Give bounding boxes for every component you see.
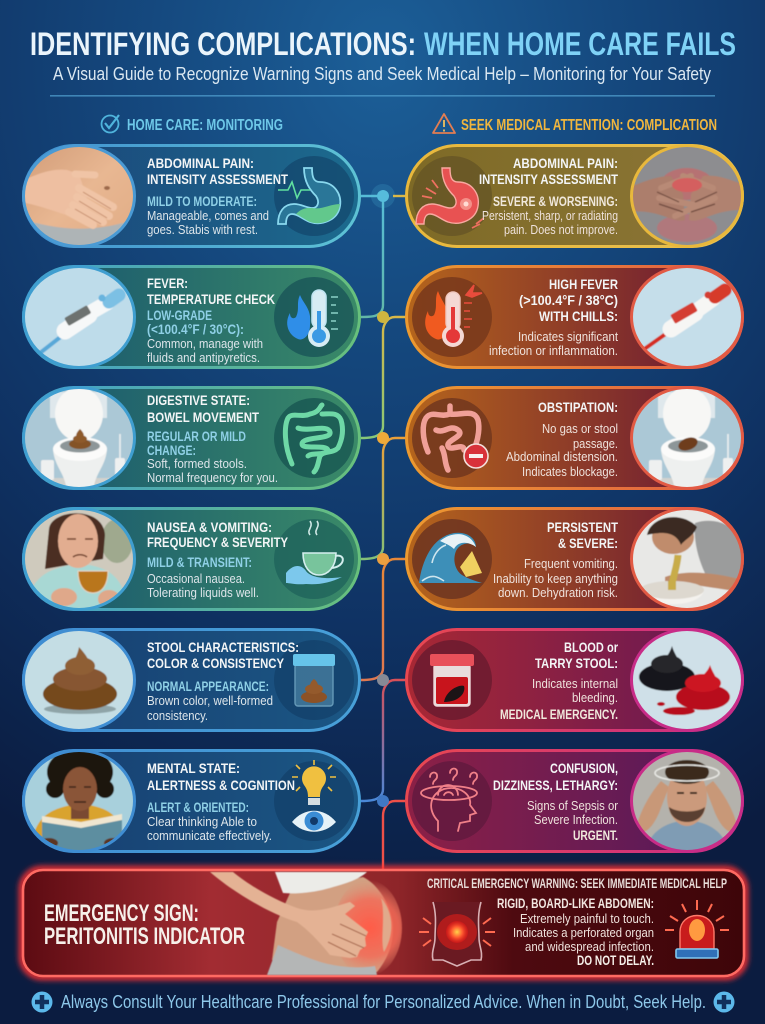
text block — [500, 639, 618, 722]
icon: confused head — [412, 761, 492, 841]
text block: Signs of Sepsis or — [527, 798, 619, 813]
text block: fluids and antipyretics. — [147, 350, 260, 365]
photo: dizzy man holding head — [630, 749, 744, 853]
icon: warning triangle — [433, 114, 455, 133]
panel: digestive state, home care — [19, 383, 360, 498]
photo: toilet with hard stool — [630, 386, 744, 490]
text block: infection or inflammation. — [489, 343, 618, 358]
text block: INTENSITY ASSESSMENT — [479, 171, 618, 187]
photo: digital thermometer — [22, 265, 136, 369]
photo: man vomiting into bowl — [630, 507, 744, 611]
heading: emergency sign: EMERGENCY SIGN: — [44, 900, 199, 927]
column heading: home care — [102, 115, 283, 134]
icon: light bulb and eye — [274, 760, 354, 841]
panel: obstipation, complication — [406, 383, 747, 498]
text block: STOOL CHARACTERISTICS: — [147, 639, 299, 655]
text block: Soft, formed stools. — [147, 456, 247, 471]
icon: blocked intestines — [412, 398, 492, 478]
text block: passage. — [573, 436, 618, 451]
photo: black and red stool — [630, 628, 744, 732]
warning text: Indicates a perforated organ — [513, 925, 654, 940]
text block: down. Dehydration risk. — [498, 585, 618, 600]
heading: emergency sign — [44, 900, 245, 950]
text block: INTENSITY ASSESSMENT — [147, 171, 288, 187]
text block — [479, 155, 618, 237]
node 5 — [377, 674, 389, 686]
icon: specimen jar — [274, 640, 354, 720]
text block: & SEVERE: — [558, 535, 618, 551]
text block: No gas or stool — [542, 421, 618, 436]
panel: stool characteristics, home care — [19, 625, 360, 735]
text block: BOWEL MOVEMENT — [147, 409, 259, 425]
text block: BLOOD or — [564, 639, 618, 655]
photo: hand on abdomen — [22, 147, 136, 245]
text block: OBSTIPATION: — [538, 399, 618, 415]
text block — [147, 275, 275, 365]
text block: URGENT. — [573, 828, 618, 843]
icon: wave — [412, 519, 492, 599]
text block: Inability to keep anything — [493, 571, 618, 586]
text block: TEMPERATURE CHECK — [147, 291, 275, 307]
warning text: and widespread infection. — [525, 939, 654, 954]
warning text: RIGID, BOARD-LIKE ABDOMEN: — [497, 895, 654, 911]
text block: bleeding. — [572, 690, 618, 705]
text block: Frequent vomiting. — [524, 556, 618, 571]
text block: NORMAL APPEARANCE: — [147, 679, 269, 694]
text block: PERSISTENT — [547, 519, 618, 535]
text block: ABDOMINAL PAIN: — [147, 155, 254, 171]
text block: TARRY STOOL: — [535, 655, 618, 671]
text block: HIGH FEVER — [549, 276, 618, 292]
panel: blood or tarry stool, complication — [406, 625, 747, 735]
panel: confusion and dizziness, complication — [406, 746, 747, 856]
text block: CHANGE: — [147, 443, 196, 458]
text block — [147, 519, 289, 600]
icon: plus right — [714, 992, 734, 1012]
text block: FREQUENCY & SEVERITY — [147, 534, 289, 550]
panel: fever, home care — [19, 262, 360, 372]
node 4 — [377, 553, 389, 565]
text block: Common, manage with — [147, 336, 263, 351]
text block — [493, 519, 618, 600]
icon: blue thermometer and flame — [274, 277, 354, 357]
icon: blood specimen jar — [412, 640, 492, 720]
column heading: seek medical attention — [433, 114, 717, 134]
node 3 — [377, 432, 389, 444]
photo: normal stool — [22, 631, 136, 729]
icon: siren — [665, 900, 729, 958]
text block — [147, 392, 278, 485]
text block — [147, 639, 299, 723]
text block: Severe Infection. — [534, 812, 618, 827]
title: IDENTIFYING COMPLICATIONS: — [30, 26, 416, 62]
text block: Occasional nausea. — [147, 571, 245, 586]
text block: goes. Stabis with rest. — [147, 222, 258, 237]
text block: ABDOMINAL PAIN: — [513, 155, 618, 171]
panel: abdominal pain, home care — [19, 141, 360, 256]
icon: green intestines — [274, 398, 354, 478]
text block: SEVERE & WORSENING: — [493, 194, 618, 209]
text block: NAUSEA & VOMITING: — [147, 519, 272, 535]
photo: woman reading — [22, 752, 136, 850]
panel: nausea and vomiting, home care — [19, 504, 360, 614]
icon: inflamed torso — [419, 902, 495, 966]
text block — [489, 276, 618, 358]
icon: plus left — [32, 992, 52, 1012]
photo: toilet with normal stool — [22, 386, 136, 490]
icon: tea cup and wave — [274, 519, 354, 599]
panel: emergency peritonitis — [22, 869, 745, 977]
text block: Abdominal distension. — [506, 449, 618, 464]
panel: mental state, home care — [19, 746, 360, 856]
title — [30, 26, 736, 62]
text block: Indicates internal — [532, 676, 618, 691]
node 6 — [377, 795, 389, 807]
text block — [147, 760, 295, 843]
icon: stomach — [274, 156, 354, 236]
text block: COLOR & CONSISTENCY — [147, 655, 285, 671]
text block — [493, 760, 619, 843]
text block: MILD & TRANSIENT: — [147, 555, 252, 570]
text block — [506, 399, 618, 479]
text block: Tolerating liquids well. — [147, 585, 259, 600]
text block: DIGESTIVE STATE: — [147, 392, 250, 408]
heading: emergency sign: PERITONITIS INDICATOR — [44, 923, 245, 950]
icon: inflamed stomach — [412, 156, 492, 236]
text block: Persistent, sharp, or radiating — [482, 208, 618, 223]
text block: WITH CHILLS: — [539, 308, 618, 324]
warning text: Extremely painful to touch. — [520, 911, 654, 926]
text block: pain. Does not improve. — [504, 222, 618, 237]
warning text — [497, 895, 654, 968]
node 1 — [377, 190, 389, 202]
text block: REGULAR OR MILD — [147, 429, 246, 444]
photo: red thermometer — [630, 265, 744, 369]
text block: (>100.4°F / 38°C) — [519, 292, 618, 308]
warning text: DO NOT DELAY. — [577, 952, 654, 968]
photo: woman sipping tea — [22, 507, 136, 611]
heading text: HOME CARE: MONITORING — [127, 117, 283, 134]
node 2 — [377, 311, 389, 323]
text block: Indicates significant — [518, 329, 618, 344]
text block: communicate effectively. — [147, 828, 272, 843]
connector timeline — [361, 184, 405, 869]
text block: consistency. — [147, 708, 208, 723]
panel: persistent vomiting, complication — [406, 504, 747, 614]
icon: check circle — [102, 115, 119, 132]
text block: ALERT & ORIENTED: — [147, 800, 249, 815]
text block: CONFUSION, — [550, 760, 618, 776]
text block: FEVER: — [147, 275, 188, 291]
text block: (<100.4°F / 30°C): — [147, 322, 244, 337]
text block: Clear thinking Able to — [147, 814, 257, 829]
text block: ALERTNESS & COGNITION — [147, 777, 295, 793]
text block: DIZZINESS, LETHARGY: — [493, 777, 618, 793]
text block — [147, 155, 288, 237]
text block: MEDICAL EMERGENCY. — [500, 707, 618, 722]
text block: MILD TO MODERATE: — [147, 194, 257, 209]
icon: red thermometer and flame — [412, 277, 492, 357]
footer note — [32, 992, 734, 1012]
text block: MENTAL STATE: — [147, 760, 240, 776]
text block: Indicates blockage. — [522, 464, 618, 479]
text block: Normal frequency for you. — [147, 470, 278, 485]
panel: abdominal pain, complication — [406, 141, 747, 251]
panel: high fever, complication — [406, 262, 747, 372]
text block: LOW-GRADE — [147, 308, 212, 323]
photo: abdomen with glowing pain — [210, 872, 402, 976]
photo: hands clutching abdomen — [630, 144, 744, 248]
text block: Manageable, comes and — [147, 208, 269, 223]
text block: Brown color, well-formed — [147, 693, 273, 708]
